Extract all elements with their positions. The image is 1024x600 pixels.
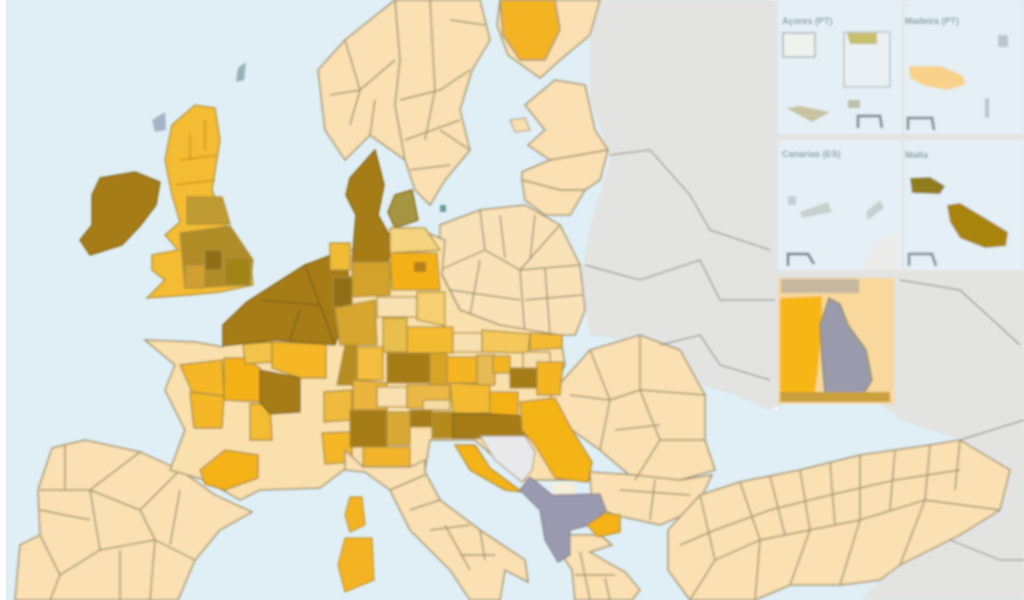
Greece — [562, 535, 640, 600]
label: Madeira: Madeira (PT) — [905, 16, 959, 26]
small islands and Baltic details — [510, 118, 530, 132]
French dark region — [260, 370, 300, 414]
Italy — [345, 450, 528, 600]
Croatia mid band — [455, 398, 592, 492]
Macedonia — [587, 513, 620, 537]
former Yugoslavia pale area — [480, 436, 535, 482]
panel: Luxembourg inset — [778, 278, 894, 404]
France and central Europe base — [145, 230, 590, 500]
Iberia — [15, 440, 252, 600]
French regions — [180, 342, 352, 490]
panel: Canarias inset — [778, 140, 902, 270]
Slovenia to Hungary dark belt — [453, 414, 530, 438]
Corsica and Sardinia — [338, 497, 374, 592]
Baltic states — [522, 80, 608, 215]
label: Azores: Açores (PT) — [782, 16, 833, 26]
Poland — [440, 205, 585, 335]
panel: Azores inset — [778, 0, 902, 134]
panel: Madeira inset — [904, 0, 1024, 134]
Gozo island — [910, 177, 945, 194]
Low Countries and north-west Germany dark band — [223, 250, 352, 346]
inset title bar — [781, 279, 859, 293]
Alpine mosaic — [350, 330, 563, 467]
Hungary Slovakia Romania Bulgaria — [550, 335, 715, 525]
Nordic: Norway and Sweden — [318, 0, 490, 205]
label: Canarias: Canarias (ES) — [782, 149, 841, 159]
non-member land, east — [580, 0, 1024, 600]
Germany mosaic — [330, 228, 453, 385]
Turkey — [668, 440, 1010, 600]
Ireland — [80, 172, 160, 255]
inset bottom band — [780, 392, 890, 402]
country borders in the east — [585, 150, 1024, 560]
grey non-data region: Serbia, Albania — [520, 477, 606, 562]
Denmark — [346, 150, 418, 262]
Britain — [147, 105, 253, 298]
grey region — [820, 298, 872, 393]
mid-tone region — [780, 296, 822, 392]
panel: Malta inset — [904, 140, 1024, 270]
pale patch north of Macedonia — [553, 483, 575, 497]
Malta island — [947, 203, 1008, 248]
Madeira island — [909, 66, 966, 90]
label: Malta: Malta — [905, 150, 929, 160]
Finland — [497, 0, 600, 78]
